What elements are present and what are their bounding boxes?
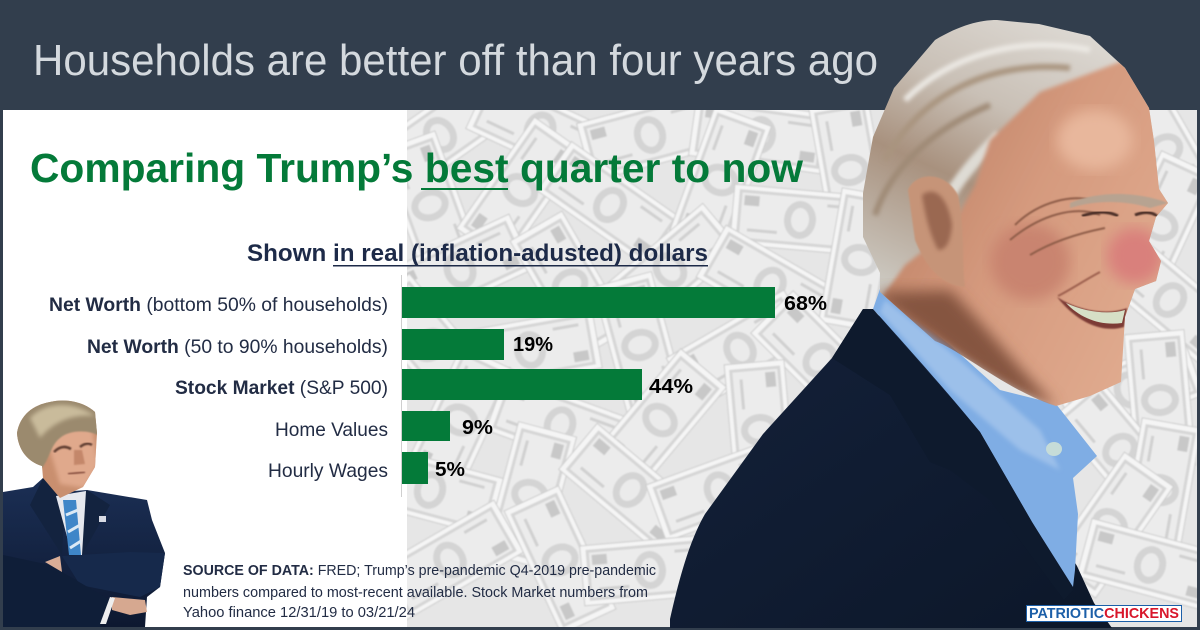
bar: net worth bottom 50% xyxy=(49,287,827,318)
bar: net worth bottom 50%: Net Worth (bottom 50% of households) xyxy=(49,294,388,316)
subheading: Shown in real (inflation-adusted) dollars xyxy=(247,240,708,267)
bar: net worth 50 to 90% xyxy=(87,329,553,360)
jacket xyxy=(670,309,1112,628)
neck shadow xyxy=(880,290,1056,406)
source note xyxy=(183,563,656,621)
bar: hourly wages: Hourly Wages xyxy=(268,460,388,482)
bar: hourly wages xyxy=(268,452,465,484)
bar: stock market: Stock Market (S&P 500) xyxy=(175,377,388,399)
money background pattern xyxy=(407,110,1197,627)
cuff and hand xyxy=(112,597,147,615)
head xyxy=(17,400,97,498)
hair base xyxy=(863,20,1168,310)
head clipped to silhouette xyxy=(863,20,1168,406)
title: Households are better off than four years ago xyxy=(33,36,878,85)
source note: Yahoo finance 12/31/19 to 03/21/24 xyxy=(183,605,415,621)
bar: net worth bottom 50%: 68% xyxy=(784,293,827,315)
forehead highlight xyxy=(1057,110,1133,170)
teeth xyxy=(1066,303,1125,324)
skin xyxy=(880,60,1180,410)
jacket xyxy=(3,478,165,627)
ear xyxy=(908,176,965,287)
bar: home values: Home Values xyxy=(275,419,388,441)
bar: net worth 50 to 90%: 19% xyxy=(513,334,553,356)
nose xyxy=(1107,228,1163,284)
bar chart xyxy=(49,275,827,497)
lapel xyxy=(832,309,1073,600)
photo: Trump with arms crossed xyxy=(3,395,165,627)
bar: home values xyxy=(275,411,493,441)
bar: home values: 9% xyxy=(462,417,493,439)
bar: stock market xyxy=(175,369,693,400)
bar: hourly wages: 5% xyxy=(435,459,465,481)
crossed arm xyxy=(62,552,165,597)
flag pin xyxy=(99,516,106,522)
hair streaks xyxy=(875,45,1090,215)
photo: Biden smiling xyxy=(670,10,1180,628)
lapel shading xyxy=(30,478,110,555)
source note: SOURCE OF DATA: FRED; Trump’s pre-pandemic Q4-2019 pre-pandemic xyxy=(183,563,656,579)
logo: Patriotic Chickens: PATRIOTICCHICKENS xyxy=(1029,605,1179,622)
smile xyxy=(1057,297,1127,329)
heading: Comparing Trump’s best quarter to now xyxy=(30,145,803,191)
wrinkles xyxy=(1010,198,1105,255)
shirt collar xyxy=(873,289,1097,587)
cheek xyxy=(990,224,1070,300)
eyebrow and eye xyxy=(1070,194,1168,208)
bar: stock market: 44% xyxy=(649,376,693,398)
source note: numbers compared to most-recent available. Stock Market numbers from xyxy=(183,585,648,601)
bar: net worth 50 to 90%: Net Worth (50 to 90% households) xyxy=(87,336,388,358)
shirt and tie xyxy=(56,491,86,555)
collar button xyxy=(1046,442,1062,456)
